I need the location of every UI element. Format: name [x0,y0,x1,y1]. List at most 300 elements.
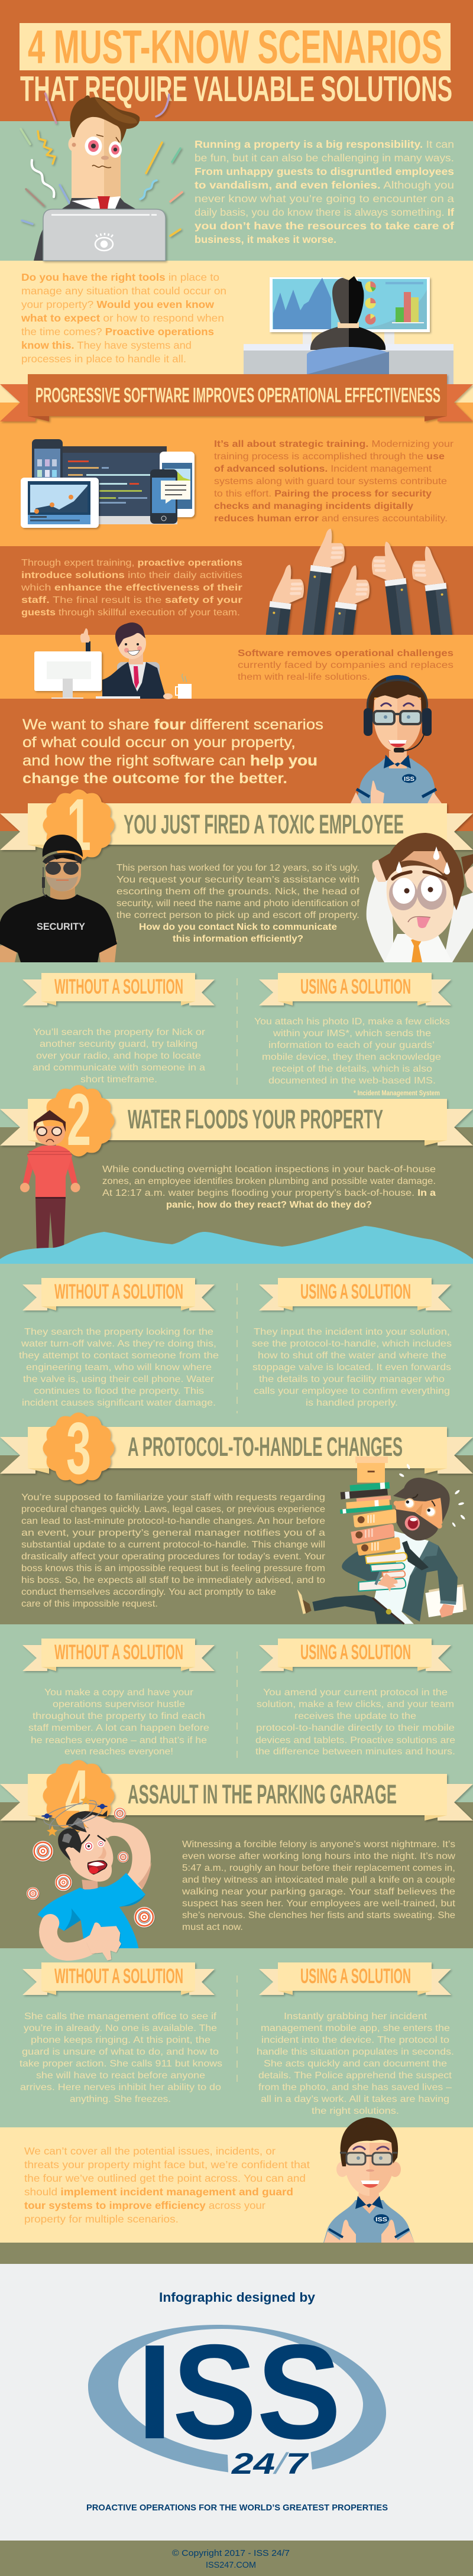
closing paragraph: We can’t cover all the potential issues, incidents, or [24,2145,276,2157]
without text: engineering team, who will know where [26,1362,212,1373]
intro paragraph: business, it makes it worse. [195,233,336,245]
using text: the details to your facility manager who [259,1374,445,1384]
without text: arrives. Here nerves inhibit her ability to do [20,2082,221,2092]
tie [411,938,422,962]
strategic training paragraph: It’s all about strategic training. Modernizing your [214,439,454,449]
ribbon: without a solution: WITHOUT A SOLUTION [54,1280,183,1303]
laptop [62,446,167,516]
earpiece wire [43,867,46,897]
expert training paragraph: guests through skillful execution of your team. [21,608,240,618]
using text: incident into the device. The protocol to [261,2035,449,2045]
logo badge [402,774,416,783]
dizzy spirals [27,1808,154,1928]
flat books [365,1553,407,1563]
microphone [404,733,425,751]
second paragraph [21,271,226,365]
chair [117,662,160,679]
expert training paragraph [21,558,242,618]
using text: is handled properly. [306,1398,398,1408]
section 3 scenario text: You’re supposed to familiarize your staff with requests regarding [21,1493,325,1503]
using text: documented in the web-based IMS. [268,1076,436,1086]
face [387,865,453,942]
without text: water turn-off valve. As they’re doing this, [21,1339,216,1349]
using text: calls your employee to confirm everything [254,1386,450,1396]
tablet [21,478,99,528]
neck and head [129,650,143,664]
without text: anything. She freezes. [70,2094,171,2104]
face [67,1826,113,1881]
logo letters: ISS [137,2317,341,2467]
expert training paragraph: staff. The final result is the safety of your [21,595,242,605]
using text: They input the incident into your solution, [254,1327,450,1337]
strategic training paragraph [214,439,454,524]
section 4 comparison [20,1962,454,2116]
strategic training paragraph: to this effort. Pairing the process for security [214,489,432,499]
intro paragraph [195,138,454,245]
collar [384,755,411,768]
illustration: happy businessman at computer [34,622,192,699]
section 4 scenario text: must act now. [182,1922,243,1932]
tie [402,1541,429,1571]
shirt [37,1873,145,1948]
suit [102,662,166,699]
illustration: closing agent [323,2117,414,2243]
section 3 ribbon [0,1427,473,1474]
beard [46,876,78,891]
face [124,643,142,656]
illustration: thumbs up hands [266,528,454,635]
glasses [374,711,421,724]
illustration: dizzy man [27,1795,154,1961]
jacket cuff [440,1600,456,1605]
illustration: panicked employee [367,833,473,962]
hair [393,1478,450,1522]
sleeve cuffs [357,789,436,797]
using text: Instantly grabbing her incident [284,2012,427,2022]
neck [389,751,407,768]
pants [35,1197,66,1250]
copyright footer [172,2548,290,2570]
hair [115,622,145,647]
raised arm [86,641,90,653]
without text: You’ll search the property for Nick or [33,1027,206,1037]
monitor [34,651,102,691]
without text [28,1688,209,1757]
eyes [393,878,415,904]
illustration: security guard [0,835,117,962]
using text: information to each of your guards’ [268,1040,435,1050]
beard [394,1507,438,1540]
monitor stands [303,332,312,344]
second paragraph: manage any situation that could occur on [21,285,226,297]
pants waistband [35,1197,66,1199]
worker hair [332,278,349,323]
box lid and box [355,1456,388,1463]
brows [381,703,414,706]
section 1 comparison [22,973,451,1097]
face [374,694,421,752]
shoe [302,1599,312,1614]
without text: the valve is, using their cell phone. Water [23,1374,215,1384]
without text: another security guard, try talking [40,1039,197,1049]
ribbon: without a solution: WITHOUT A SOLUTION [54,1965,183,1988]
shirt [374,1531,429,1624]
illustration: sad man [20,1110,80,1250]
section 3 scenario text: boss knows this is an impossible request but is feeling pressure from [21,1563,325,1573]
without text: throughout the property to find each [33,1711,205,1721]
section 3 scenario text: conduct themselves accordingly. You act promptly to take [21,1587,276,1597]
using text: management mobile app, she enters the [261,2023,450,2033]
glasses [37,1127,61,1135]
laptop eye logo [95,233,113,251]
without text: even reaches everyone! [64,1747,173,1757]
lower arm [48,1923,99,1952]
strategic training paragraph: checks and managing incidents digitally [214,501,413,511]
hands [372,860,389,882]
face [46,857,81,891]
software paragraph: them with real-life solutions. [238,672,370,682]
laptop [43,209,166,261]
logo swoosh [88,2325,386,2472]
without text [33,1027,206,1085]
pie charts [365,281,376,325]
using text [255,1688,455,1757]
mouth [46,1140,54,1142]
using text: within your IMS*, which sends the [273,1029,431,1039]
dark front phone [150,469,177,524]
illustration: person at monitors [244,276,453,386]
paragraph: we want to share: We want to share four different scenarios [22,716,323,733]
belt [372,1598,404,1624]
using text [257,2012,454,2116]
using text [252,1327,452,1408]
logo badge: ISS [375,2216,387,2223]
left monitor [270,277,343,332]
section 1 scenario text: You request your security team’s assistance with [116,875,359,885]
section 3 scenario text: an event, your property’s general manager notifies you of a [21,1528,325,1538]
ribbon: without a solution [22,973,215,1005]
eye bags [389,878,417,910]
book stack [350,1482,390,1491]
orbit lines [42,1795,104,1836]
without text: staff member. A lot can happen before [28,1723,209,1733]
section 2 scenario text [102,1164,436,1210]
section 3 scenario text: procedural changes quickly. Laws, legal cases, or previous experience [21,1504,325,1514]
ribbon: without a solution: WITHOUT A SOLUTION [54,975,183,998]
arms and thumbs [324,2220,356,2243]
closing paragraph: the four we’ve outlined get the point across. You can and [24,2172,306,2184]
second paragraph: processes in place to handle it all. [21,353,186,365]
section 4 scenario text: suspect has seen her. Your employees are well-trained, but [182,1899,456,1909]
without text: short timeframe. [80,1075,157,1085]
section 4 scenario text: walking near your parking garage. Your staff believes the [182,1887,455,1897]
using text: solution, make a few clicks, and your team [257,1699,454,1709]
section 2 scenario text: zones, an employee identifies broken plumbing and possible water damage. [102,1176,436,1186]
paragraph: we want to share: and how the right software can help you [22,752,318,769]
section 3 scenario text: his boss. So, he expects all staff to be immediately advised, and to [21,1575,325,1585]
using text: all in a day’s work. All it takes are having [261,2094,449,2104]
ribbon: using a solution [259,973,451,1005]
hands [20,1183,30,1192]
worker shoulders and neck [310,327,349,350]
title block [20,20,452,109]
banner: progressive software [0,374,473,421]
ear [66,1847,73,1857]
intro paragraph: never know what you’re going to encounter on a [195,193,454,205]
hair [66,1811,108,1832]
without text: operations supervisor hustle [53,1699,185,1709]
shirt [384,934,452,962]
section 1 scenario text: escorting them off the grounds. Nick, the head of [116,887,360,897]
section 1 badge [43,784,115,866]
section 3 badge [43,1408,115,1490]
paragraph: we want to share [22,716,323,787]
cap [43,835,83,857]
back-left phone [32,439,63,486]
hair [34,1110,66,1132]
hand on books [377,1573,398,1592]
section 2 scenario text: panic, how do they react? What do they do? [166,1200,372,1210]
brows [393,872,446,879]
closing paragraph: tour systems to improve efficiency across your [24,2199,265,2211]
using text: You amend your current protocol in the [263,1688,448,1698]
section 4 badge [43,1756,115,1837]
software paragraph: currently faced by companies and replaces [238,660,453,670]
document [161,481,190,504]
using text: receives the update to the [294,1711,416,1721]
nose [98,1846,106,1859]
white phone [160,452,195,517]
ribbon: without a solution: WITHOUT A SOLUTION [54,1641,183,1664]
closing paragraph: threats your property might face but, we’re confident that [24,2159,310,2171]
intro paragraph: be fun, but it can also be challenging in many ways. [195,152,454,164]
without text [19,1327,219,1408]
illustration: devices [21,439,195,528]
arms [0,940,117,962]
hair [367,675,427,718]
arms [22,1153,78,1185]
section 4 scenario text: Witnessing a forcible felony is anyone’s worst nightmare. It’s [182,1839,455,1850]
ear [69,137,78,151]
strategic training paragraph: reduces human error and ensures accountability. [214,514,448,524]
using text: mobile device, they then acknowledge [262,1052,441,1062]
right arm [443,893,473,962]
software paragraph [238,648,453,682]
sweat drops [396,846,450,875]
section 3 comparison [22,1639,455,1759]
without text: She calls the management office to see if [24,2012,217,2022]
nose [416,1503,423,1515]
chair [307,347,389,374]
strategic training paragraph: training process is accomplished through the use [214,452,445,462]
binders [353,1509,397,1527]
without text: guard is unsure of what to do, and how to [22,2047,219,2057]
section 3 scenario text: can lead to last-minute protocol-to-handle changes. An hour before [21,1516,325,1526]
using text: how to shut off the water and where the [258,1351,446,1361]
left arm [367,875,393,962]
head and neck [72,116,121,198]
intro paragraph: From unhappy guests to disgruntled employees [195,166,454,177]
without text: over your radio, and hope to locate [36,1051,201,1061]
stress lines [21,93,182,236]
mouth [388,740,407,747]
section 1 scenario text: the correct person to pick up and escort off property. [116,910,359,920]
without text: incident causes significant water damage. [22,1398,216,1408]
logo 24/7: 24 /7 [231,2447,309,2480]
section 4 scenario text: even worse after working long hours into the night. It’s now [182,1851,455,1861]
using text: She acts quickly and can document the [264,2059,447,2069]
eyes [85,137,102,155]
sleeve cuff [374,1571,382,1585]
without text: take proper action. She calls 911 but knows [20,2059,222,2069]
hair fringe [53,854,76,861]
brows [81,1834,105,1844]
section 3 badge: 3 [66,1408,91,1490]
second paragraph: Do you have the right tools in place to [21,271,219,283]
hair [341,2117,398,2166]
without text: you’re in already. No one is available. The [24,2023,217,2033]
paragraph: we want to share: change the outcome for the better. [22,770,287,787]
planets [41,1804,108,1819]
section 1 scenario text: This person has worked for you for 12 years, so it’s ugly. [116,863,359,873]
using text: the difference between minutes and hours. [255,1747,455,1757]
raised arm [108,1822,151,1890]
section 3 scenario text [21,1493,326,1609]
without text: You make a copy and have your [44,1688,194,1698]
polo shirt [323,2200,414,2243]
section 1 ribbon [0,803,473,850]
logo badge [374,2214,389,2224]
neck [82,1880,98,1890]
without text [20,2012,222,2104]
intro paragraph: Running a property is a big responsibility. It can [195,138,454,150]
section 4 scenario text [182,1839,456,1932]
hand on head [82,1815,114,1838]
jacket [402,1541,458,1621]
using text: protocol-to-handle directly to their mobile [256,1723,455,1733]
bar chart [392,292,424,323]
section 2 badge [43,1079,115,1161]
footnote: * Incident Management System [354,1090,440,1097]
designed by heading: Infographic designed by [159,2290,316,2305]
papers [429,1584,466,1615]
intro paragraph: you don’t have the resources to take care of [195,220,454,232]
mouth [405,1516,420,1530]
second paragraph: your property? Would you even know [21,299,214,310]
using text: from the photo, and she has saved lives – [258,2082,452,2092]
neck [358,2187,380,2214]
without text: and communicate with someone in a [33,1063,205,1073]
collar [355,2196,383,2209]
expert training paragraph: Through expert training, proactive operations [21,558,242,568]
tagline: PROACTIVE OPERATIONS FOR THE WORLD’S GREATEST PROPERTIES [86,2503,388,2513]
arms and thumb [351,792,442,803]
brows [353,2146,389,2150]
section 4 scenario text: she’s nervous. She clenches her fists and starts sweating. She [182,1910,455,1920]
hand on hip [87,1922,121,1961]
illustration: flood water [0,1226,473,1264]
intro paragraph: to vandalism, and even felonies. Although you [195,179,454,191]
section 2 scenario text: At 12:17 a.m. water begins flooding your property’s back-of-house. In a [102,1188,436,1198]
coffee mug [178,684,192,699]
using text: receipt of the details, which is also [272,1064,432,1074]
mouth [361,2181,380,2188]
section 4 ribbon [0,1774,473,1821]
head [35,1126,65,1146]
mouth [88,1861,107,1874]
using text: stoppage valve is located. It even forwards [252,1362,451,1373]
intro paragraph: daily basis, you do know there is always something. If [195,206,454,218]
copyright footer: ISS247.COM [206,2560,256,2570]
section 1 scenario text: this information efficiently? [173,934,303,944]
without text: he reaches everyone – and that’s if he [31,1735,207,1746]
second paragraph: know this. They have systems and [21,339,192,351]
without text: she will have to react before anyone [36,2071,205,2081]
hair back [386,833,464,910]
hand on desk [163,693,173,699]
software paragraph: Software removes operational challenges [238,648,453,658]
section 4 scenario text: 5:47 a.m., roughly an hour before their replacement comes in, [182,1863,455,1873]
shirt [0,894,117,962]
face [345,2143,393,2196]
ears [336,2162,348,2177]
ribbon: without a solution [22,1278,215,1310]
sweater [27,1146,72,1197]
section 1 scenario text [116,863,360,944]
using text [254,1017,450,1086]
section 4 badge: 4 [65,1756,89,1837]
using text: the right solutions. [312,2106,399,2116]
closing paragraph: property for multiple scenarios. [24,2213,179,2225]
section 2 ribbon [0,1099,473,1146]
section 1 badge: 1 [67,784,91,866]
second paragraph: the time comes? Proactive operations [21,326,214,338]
keyboard [96,696,140,699]
using text: devices and tablets. Proactive solutions are [255,1735,455,1746]
neck [50,881,75,901]
brows [413,1494,435,1506]
without text: phone keeps ringing. At this point, the [31,2035,210,2045]
section 3 scenario text: drastically affect your operating procedures for today’s event. Your [21,1552,326,1562]
security label: SECURITY [37,921,86,932]
strategic training paragraph: of advanced solutions. Incident management [214,464,432,474]
without text: They search the property looking for the [24,1327,213,1337]
using text: You attach his photo ID, make a few clicks [254,1017,450,1027]
hand with papers [439,1604,454,1618]
section 4 scenario text: and they witness an intoxicated male pull a knife on a couple [182,1875,455,1885]
nose [366,2169,374,2172]
ribbon: without a solution [22,1962,215,1995]
closing paragraph [24,2145,310,2225]
face [394,1497,442,1528]
using text: see the protocol-to-handle, which includes [252,1339,452,1349]
ribbon: using a solution [259,1639,451,1671]
illustration: headset agent [351,675,442,803]
ear cups [364,708,372,736]
paragraph: we want to share: of what could occur on your property, [22,734,296,751]
section 3 scenario text: substantial update to a current protocol-to-handle. This change will [21,1540,325,1550]
trousers [312,1595,404,1624]
polo shirt [356,758,436,803]
illustration: man running with binders [297,1456,466,1624]
without text: continues to flood the property. This [34,1386,204,1396]
without text: they attempt to contact someone from the [19,1351,219,1361]
second paragraph: what to expect or how to respond when [21,312,224,324]
section 2 badge: 2 [67,1079,91,1161]
left arm [342,1550,381,1584]
headband [386,675,409,683]
footer logo block [86,2290,388,2513]
